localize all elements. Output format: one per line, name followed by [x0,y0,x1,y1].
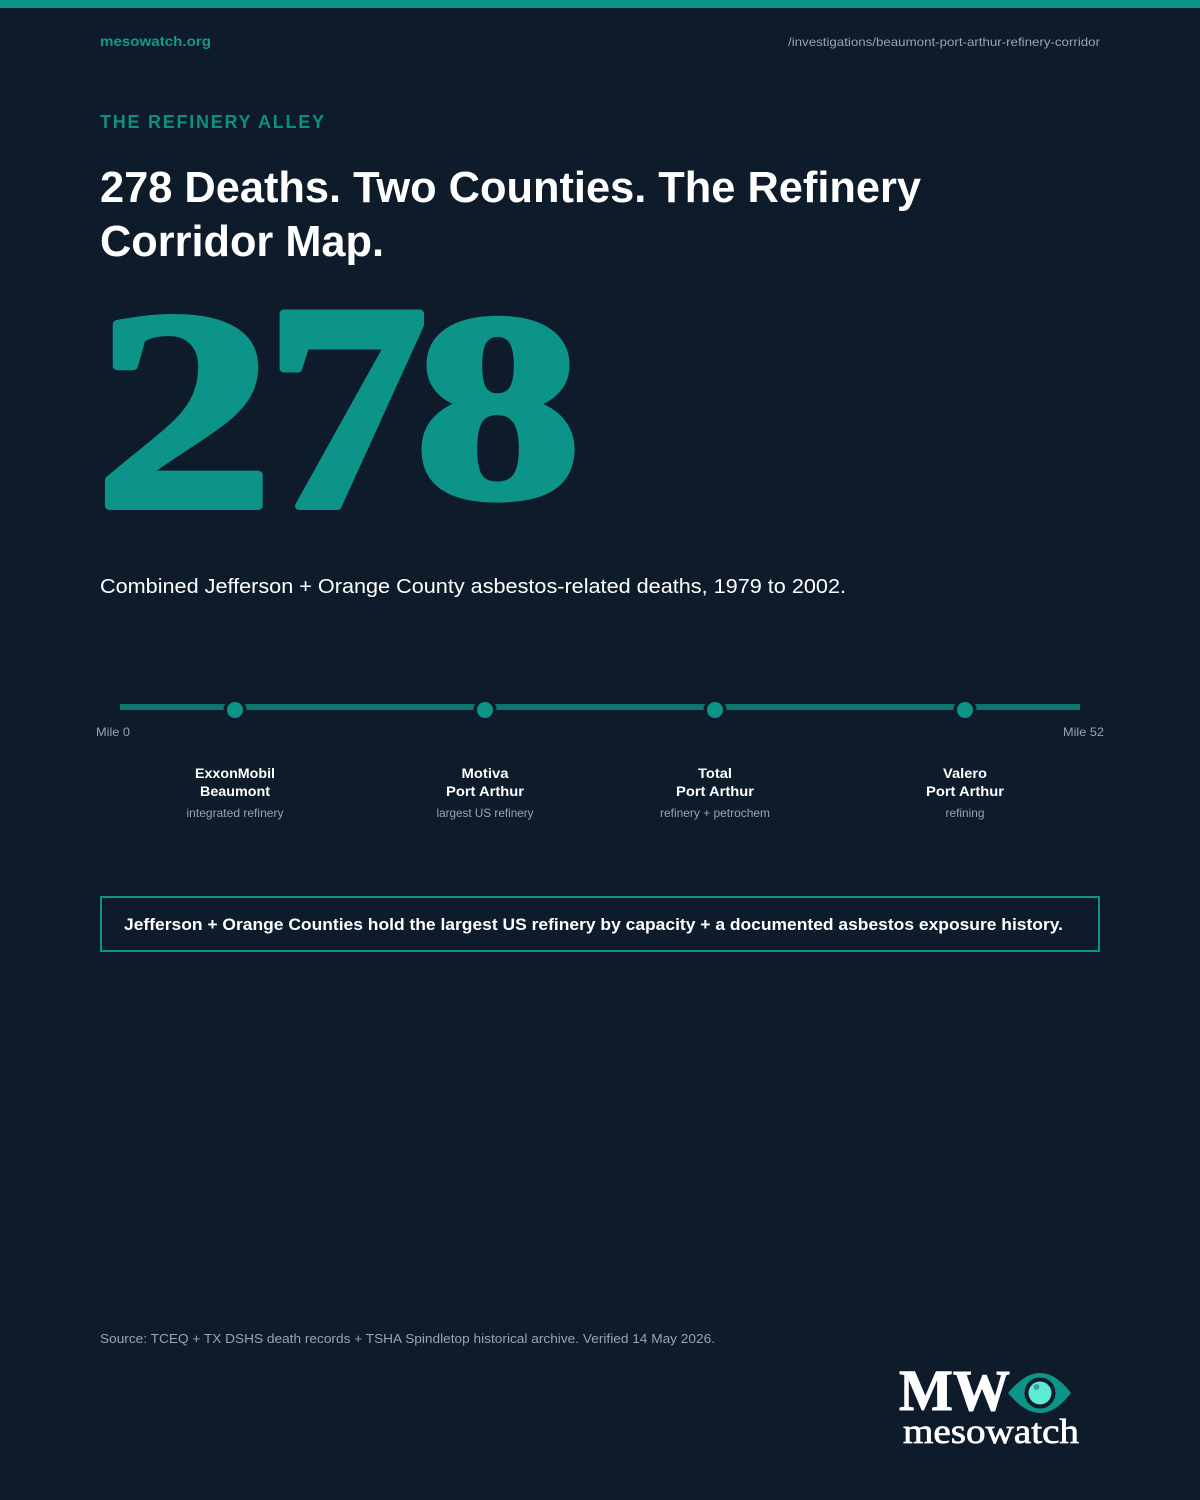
stop label: Total Port Arthur: Port Arthur [676,783,755,799]
mile 0 label: Mile 0 [96,725,130,739]
stop label: Valero Port Arthur: refining [946,806,984,820]
url path: /investigations/beaumont-port-arthur-refinery-corridor [788,35,1100,49]
top accent bar [0,0,1200,8]
stop label: Valero Port Arthur: Valero [943,765,987,781]
corridor timeline [120,698,1080,722]
stop marker: Motiva [474,698,496,722]
stop label: Motiva Port Arthur [436,765,534,820]
stop label: Motiva Port Arthur: Port Arthur [446,783,525,799]
eyebrow: THE REFINERY ALLEY [100,112,324,132]
source note: Source: TCEQ + TX DSHS death records + TSHA Spindletop historical archive. Verified 14 May 2026. [100,1331,715,1346]
stop label: Total Port Arthur: refinery + petrochem [660,806,770,820]
title: 278 Deaths. Two Counties. The Refinery [100,163,922,212]
title [100,163,922,266]
big number 278 [95,244,580,570]
stop marker: Valero [954,698,976,722]
stop label: Valero Port Arthur: Port Arthur [926,783,1005,799]
logo monogram: MW [899,1358,1010,1423]
stop label: ExxonMobil Beaumont: integrated refinery [186,806,284,820]
stop label: ExxonMobil Beaumont: Beaumont [200,783,270,799]
subtitle: Combined Jefferson + Orange County asbestos-related deaths, 1979 to 2002. [100,576,846,598]
mile 52 label: Mile 52 [1063,725,1104,739]
icon: eye [1008,1373,1071,1413]
stop label: ExxonMobil Beaumont [186,765,284,820]
title: Corridor Map. [100,217,384,266]
stop label: Valero Port Arthur [926,765,1005,820]
stop label: Total Port Arthur [660,765,770,820]
big number 278: 2 [95,254,273,568]
logo wordmark: mesowatch [903,1412,1080,1451]
big number 278: 8 [416,261,580,554]
stop marker: ExxonMobil [224,698,246,722]
callout [101,897,1099,951]
big number 278: 7 [266,244,428,570]
stop label: ExxonMobil Beaumont: ExxonMobil [195,765,275,781]
stop label: Total Port Arthur: Total [698,765,732,781]
stop marker: Total [704,698,726,722]
stop label: Motiva Port Arthur: largest US refinery [436,806,534,820]
callout: Jefferson + Orange Counties hold the largest US refinery by capacity + a documented asbestos exposure history. [124,915,1063,934]
stop label: Motiva Port Arthur: Motiva [462,765,509,781]
site name: mesowatch.org [100,33,211,49]
Mesowatch logo [899,1358,1080,1451]
